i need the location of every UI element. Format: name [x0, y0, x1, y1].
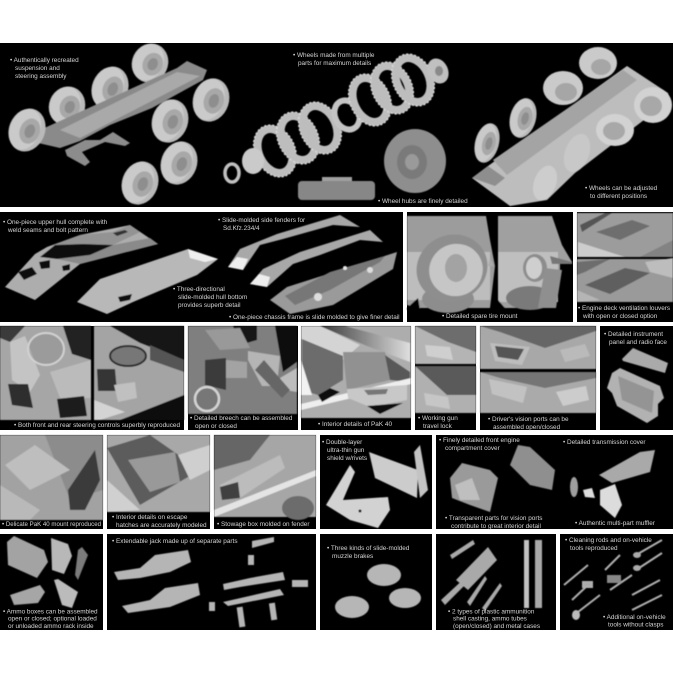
panel: engine cover and muffler — [436, 435, 673, 530]
panel: vision ports — [480, 326, 596, 431]
caption: transmission cover: • Detailed transmission cover — [563, 439, 646, 446]
image: shield parts — [326, 445, 428, 528]
caption: breech: • Detailed breech can be assembled — [190, 415, 292, 422]
caption: front engine cover: • Finely detailed front engine — [439, 437, 520, 444]
caption: on-vehicle tools: • Additional on-vehicle — [603, 614, 666, 621]
caption: breech: open or closed — [195, 423, 237, 430]
image: ports open — [480, 326, 596, 369]
caption: upper hull: weld seams and bolt pattern — [7, 227, 88, 234]
caption: wheels multi-part: • Wheels made from multiple — [293, 52, 374, 59]
image: chassis and wheels — [2, 37, 235, 210]
caption: wheels adjust: • Wheels can be adjusted — [585, 185, 657, 192]
panel: PaK 40 mount — [0, 435, 103, 529]
panel: breech — [188, 326, 298, 430]
image: hull bottom — [77, 249, 218, 314]
caption: wheels adjust: to different positions — [590, 193, 647, 200]
caption: on-vehicle tools: tools without clasps — [608, 622, 663, 628]
panel: hull parts — [0, 212, 403, 322]
panel: interior of PaK 40 — [301, 326, 411, 430]
panel: spare tire mount — [405, 212, 573, 322]
panel: instrument panel — [600, 326, 673, 430]
image: louvers open — [577, 213, 673, 257]
caption: travel lock: travel lock — [423, 423, 453, 430]
panel: jack — [107, 534, 316, 630]
panel: engine deck louvers — [577, 212, 673, 322]
image: stowage box — [214, 435, 316, 520]
image: travel lock bottom — [415, 366, 476, 413]
image: boxes — [7, 536, 88, 608]
caption: ammo: • Ammo boxes can be assembled — [3, 608, 98, 616]
caption: louvers: • Engine deck ventilation louvers — [578, 305, 670, 312]
image: ports closed — [480, 372, 596, 413]
caption: vision ports: assembled open/closed — [493, 424, 561, 431]
caption: ammo: open or closed; optional loaded — [8, 616, 97, 623]
caption: jack: • Extendable jack made up of separate parts — [112, 538, 238, 545]
caption: mount: • Delicate PaK 40 mount reproduced — [2, 521, 101, 528]
caption: ammunition: (open/closed) and metal cases — [453, 623, 540, 630]
caption: ammunition: • 2 types of plastic ammunition — [448, 608, 534, 616]
image: upper hull — [5, 225, 158, 300]
image: chassis frame — [270, 252, 397, 314]
panel: muzzle brakes — [320, 534, 432, 630]
caption: shield: ultra-thin gun — [327, 447, 365, 454]
image: engine covers — [450, 445, 655, 518]
image: spare tire right — [498, 216, 572, 310]
image: shells and tubes — [441, 540, 542, 611]
image: instrument plates — [607, 348, 668, 423]
caption: hull bottom: • Three-directional — [173, 286, 225, 293]
image: brakes — [335, 564, 421, 618]
panel: stowage box — [214, 435, 316, 529]
caption: front engine cover: compartment cover — [445, 445, 501, 452]
caption: wheels multi-part: parts for maximum details — [298, 60, 371, 67]
caption: PaK 40 interior: • Interior details of PaK 40 — [318, 421, 392, 428]
image: tools — [564, 540, 662, 620]
caption: fenders: • Slide-molded side fenders for — [218, 217, 305, 224]
panel: steering controls — [0, 326, 184, 430]
caption: suspension: steering assembly — [15, 73, 67, 80]
image: hatches — [107, 435, 210, 512]
caption: muffler: • Authentic multi-part muffler — [575, 520, 656, 527]
panel: tools — [560, 534, 673, 630]
caption: instrument panel: • Detailed instrument — [604, 331, 663, 338]
caption: shield: • Double-layer — [322, 439, 362, 446]
caption: stowage box: • Stowage box molded on fender — [217, 521, 310, 528]
image: mount — [0, 435, 103, 520]
caption: cleaning rods: tools reproduced — [570, 545, 618, 552]
caption: transparent parts: • Transparent parts for vision ports — [445, 515, 542, 522]
image: fenders — [228, 215, 383, 287]
image: travel lock top — [415, 326, 476, 364]
caption: travel lock: • Working gun — [418, 415, 458, 422]
image: rear steering — [94, 326, 184, 420]
caption: wheel hubs: • Wheel hubs are finely detailed — [378, 198, 468, 205]
image: spare tire left — [405, 216, 499, 313]
caption: vision ports: • Driver's vision ports can be — [488, 416, 569, 423]
caption: spare tire: • Detailed spare tire mount — [442, 313, 518, 320]
caption: hull bottom: provides superb detail — [178, 302, 241, 309]
image: exploded wheel parts — [225, 47, 453, 200]
image: breech — [188, 326, 297, 414]
caption: hatches: • Interior details on escape — [112, 514, 187, 521]
caption: hull bottom: slide-molded hull bottom — [178, 294, 247, 301]
caption: steering: • Both front and rear steering controls superbly reproduced — [14, 422, 180, 429]
caption: fenders: Sd.Kfz.234/4 — [223, 225, 260, 232]
caption: chassis frame: • One-piece chassis frame is slide molded to give finer detail — [229, 314, 400, 321]
caption: brakes: muzzle brakes — [332, 553, 373, 560]
image: hull underside with wheels — [470, 47, 672, 206]
panel: gun travel lock — [415, 326, 476, 430]
caption: louvers: with open or closed option — [582, 313, 658, 320]
caption: instrument panel: panel and radio face — [609, 339, 667, 346]
image: louvers closed — [577, 258, 673, 302]
panel: ammunition — [436, 534, 556, 630]
panel: gun shield — [320, 435, 432, 529]
caption: ammo: or unloaded ammo rack inside — [8, 623, 94, 630]
panel: suspension and wheels — [0, 37, 673, 210]
panel: escape hatches — [107, 435, 210, 529]
panel: ammo boxes — [0, 534, 103, 630]
caption: brakes: • Three kinds of slide-molded — [327, 545, 409, 552]
image: PaK 40 — [301, 326, 411, 418]
caption: hatches: hatches are accurately modeled — [116, 522, 207, 529]
caption: shield: shield w/rivets — [327, 455, 367, 462]
caption: cleaning rods: • Cleaning rods and on-vehicle — [565, 537, 652, 544]
caption: ammunition: shell casting, ammo tubes — [453, 616, 527, 623]
caption: upper hull: • One-piece upper hull complete with — [3, 219, 107, 226]
image: jack parts — [114, 537, 308, 627]
caption: transparent parts: contribute to great interior detail — [451, 523, 541, 530]
caption: suspension: • Authentically recreated — [10, 57, 79, 64]
caption: suspension: suspension and — [15, 65, 60, 72]
image: front steering — [0, 326, 91, 420]
